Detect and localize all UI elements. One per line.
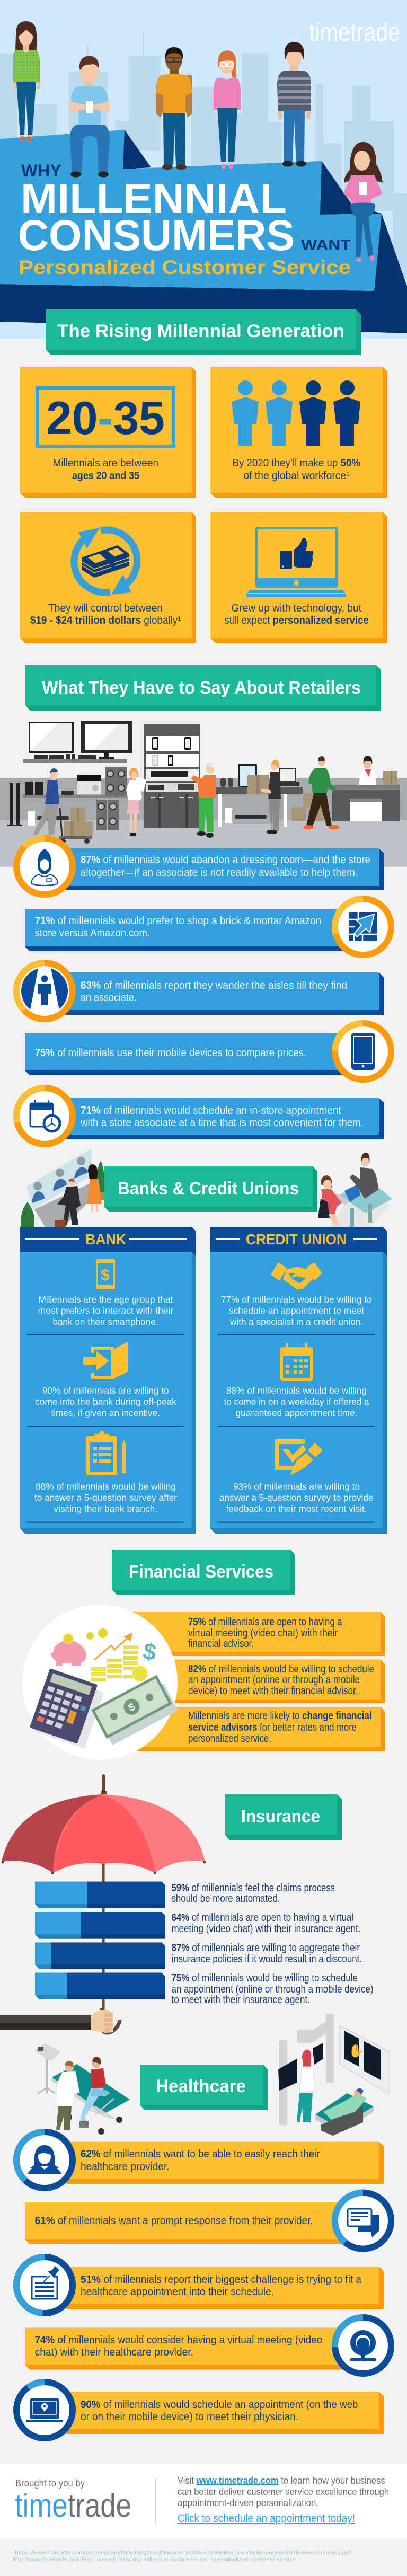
- text block: come into the bank during off-peak: [35, 1396, 176, 1407]
- text block: most prefers to interact with their: [38, 1305, 174, 1316]
- caption: [232, 457, 360, 482]
- text: [81, 2274, 362, 2298]
- checkout counter: [324, 756, 400, 821]
- icon: piggy bank: [50, 1628, 108, 1666]
- text block: times, if given an incentive.: [51, 1407, 160, 1418]
- text: [81, 980, 347, 1004]
- small x-ray plates: [278, 2043, 323, 2091]
- text: healthcare provider.: [81, 2161, 170, 2173]
- radiologist: [297, 2050, 315, 2122]
- caption: They will control between: [48, 603, 163, 614]
- stat: compare prices 75%: [25, 1023, 391, 1079]
- stat bar: virtual meeting: financial advisor.: [188, 1638, 254, 1650]
- text block: schedule an appointment to meet: [229, 1305, 364, 1316]
- banner: retailers: What They Have to Say About Retailers: [42, 678, 361, 698]
- stat bar: schedule appointment: 82% of millennials would be willing to schedule: [188, 1663, 374, 1675]
- illustration: doctor and patient: [34, 2043, 130, 2135]
- person: man in green walking: [303, 756, 340, 829]
- text block: Millennials are the age group that: [38, 1294, 173, 1305]
- text block: 77% of millennials would be willing to: [221, 1294, 372, 1305]
- icon: calculator: [29, 1668, 105, 1749]
- caption: [30, 603, 181, 626]
- caption: Millennials are between: [53, 457, 158, 469]
- stat bar: change advisors: service advisors for better rates and more: [188, 1722, 357, 1733]
- bar 64%: [35, 1912, 165, 1939]
- text block: [221, 1294, 372, 1327]
- caption: By 2020 they’ll make up 50%: [232, 457, 360, 469]
- icon: money cycle: [74, 528, 137, 595]
- text block: bank on their smartphone.: [53, 1316, 158, 1327]
- person: salesman with box: [261, 760, 281, 834]
- person: older man on phone: [191, 763, 216, 838]
- age range box: 20-35: [46, 392, 165, 444]
- text block: [224, 1385, 369, 1418]
- call to action text: can better deliver customer service excellence through: [178, 2486, 389, 2497]
- stat: dressing room 87%: [16, 838, 384, 895]
- text: altogether—if an associate is not readily available to help them.: [81, 867, 358, 879]
- card: spending power: [20, 512, 196, 643]
- banner: financial services: Financial Services: [129, 1562, 273, 1582]
- person: woman in orange dress: [87, 1164, 102, 1212]
- stat bar: change advisors: Millennials are more likely to change financial: [188, 1710, 372, 1722]
- person: seated woman with phone: [343, 142, 383, 262]
- banner: healthcare: Healthcare: [156, 2076, 246, 2096]
- banner: healthcare: [140, 2065, 268, 2110]
- banner: rising generation: [46, 309, 361, 355]
- heading: credit union: CREDIT UNION: [246, 1231, 347, 1247]
- text: [80, 1105, 364, 1129]
- text: insurance stats: insurance policies if it would result in a discount.: [172, 1953, 362, 1965]
- panel: bank: [20, 1227, 196, 1534]
- x-ray panels: ✋: [348, 2043, 364, 2058]
- icon: handshake: [271, 1262, 322, 1289]
- medical monitor stand: [34, 2043, 61, 2093]
- person: advisor: [350, 1153, 378, 1199]
- text: insurance stats: meeting (video chat) with their insurance agent.: [172, 1923, 360, 1935]
- stat: brick and mortar 71%: [25, 899, 391, 955]
- dollar sign: $: [141, 1638, 158, 1666]
- icon: chat bubbles: [335, 2193, 391, 2249]
- text: an associate.: [81, 992, 137, 1004]
- text block: [34, 1481, 177, 1514]
- text block: to come in on a weekday if offered a: [224, 1396, 369, 1407]
- banner: retailers: [25, 665, 381, 711]
- text block: to answer a 5-question survey after: [34, 1492, 177, 1503]
- text: 90% of millennials would schedule an appointment (on the web: [81, 2399, 358, 2411]
- icon: workforce people: [232, 380, 360, 446]
- illustration: money circle: [22, 1605, 178, 1760]
- text: 62% of millennials want to be able to easily reach their: [81, 2148, 320, 2160]
- card: workforce: [210, 367, 387, 498]
- person: delivery man: [33, 768, 93, 844]
- icon: mobile phone: [335, 1023, 391, 1079]
- caption: Grew up with technology, but: [231, 603, 361, 614]
- illustration: x-ray room: [278, 2014, 390, 2136]
- text: chat) with their healthcare provider.: [35, 2347, 193, 2358]
- call to action text: appointment-driven personalization.: [178, 2498, 318, 2508]
- banner: insurance: Insurance: [241, 1807, 320, 1827]
- text: [81, 2148, 320, 2173]
- banner: financial services: [112, 1550, 295, 1595]
- footer panel: [0, 2464, 407, 2539]
- consumers word: CONSUMERS: [18, 211, 295, 260]
- illustration: advisor meeting: [318, 1153, 392, 1227]
- icon: clipboard and pencil: [86, 1431, 126, 1475]
- illustration: umbrella: [1, 1774, 206, 2010]
- text: store versus Amazon.com.: [35, 927, 150, 939]
- card: ages: [20, 367, 196, 498]
- call to action text: Visit www.timetrade.com to learn how your business: [178, 2475, 385, 2486]
- text: [81, 2399, 358, 2423]
- illustration: bank tellers: [21, 1148, 105, 1227]
- laptop: [333, 1184, 360, 1205]
- stat bar: virtual meeting: virtual meeting (video chat) with their: [188, 1627, 338, 1639]
- text: 71% of millennials would schedule an in-store appointment: [81, 1105, 341, 1117]
- timetrade logo: timetrade: [15, 2488, 131, 2524]
- tree left: [21, 1202, 34, 1227]
- stat: prompt response 61%: [25, 2193, 391, 2249]
- icon: webcam: [335, 2317, 391, 2374]
- banner: rising generation: The Rising Millennial Generation: [57, 321, 344, 341]
- person: man at counter: [55, 1179, 81, 1227]
- icon: pinned note: [16, 2257, 73, 2313]
- text: insurance stats: 75% of millennials would be willing to schedule: [172, 1972, 358, 1984]
- icon: dollar bill: $: [126, 1701, 137, 1714]
- bar 75%: [35, 1972, 165, 1999]
- cardboard boxes: [291, 793, 323, 821]
- text: or on their mobile device) to meet their physician.: [81, 2411, 298, 2423]
- heading: bank: BANK: [85, 1231, 126, 1247]
- text: healthcare appointment into their schedule.: [81, 2286, 274, 2298]
- illustration: electronics store: [0, 721, 407, 867]
- text block: answer a 5-question survey to provide: [219, 1492, 373, 1503]
- text: 74% of millennials would consider having a virtual meeting (video: [35, 2334, 322, 2346]
- caption: [53, 457, 158, 482]
- icon: door with arrow: [83, 1341, 128, 1379]
- stat: wander aisles 63%: [16, 963, 384, 1019]
- stat bar: schedule appointment: an appointment (online or through a mobile: [188, 1674, 360, 1686]
- text block: 88% of millennials would be willing: [226, 1385, 367, 1396]
- stat bar: virtual meeting: [132, 1612, 385, 1656]
- text: [35, 915, 321, 939]
- person: woman in green top: [13, 21, 40, 141]
- icon: bricks and trowel: [335, 899, 391, 955]
- hero ramp: blue podium: [0, 130, 407, 333]
- text block: 90% of millennials are willing to: [42, 1385, 169, 1396]
- banner: banks and credit unions: Banks & Credit Unions: [118, 1179, 299, 1199]
- person: woman with clipboard: [126, 768, 147, 836]
- illustration: hand holding umbrella: [0, 2008, 120, 2033]
- panel: credit union: [210, 1227, 387, 1534]
- text block: with a specialist in a credit union.: [229, 1316, 363, 1327]
- call to action text: [178, 2475, 389, 2525]
- icon: coin stacks: [91, 1645, 147, 1681]
- text: insurance stats: should be more automated.: [172, 1893, 280, 1905]
- caption: of the global workforce¹: [244, 470, 350, 482]
- text: insurance stats: to meet with their insurance agent.: [172, 1994, 310, 2006]
- stat bar: virtual meeting: 75% of millennials are open to having a: [188, 1616, 342, 1628]
- caption: $19 - $24 trillion dollars globally¹: [30, 615, 181, 626]
- bar 59%: [35, 1882, 165, 1908]
- text: 87% of millennials would abandon a dressing room—and the store: [81, 854, 370, 866]
- footnotes: ¹https://www2.deloitte.com/content/dam/Deloitte/global/Documents/About-Deloitte/gx-millenial-survey-2016-exec-summary.pdf: [13, 2550, 351, 2556]
- card: technology: [210, 512, 387, 643]
- x-ray machine: [279, 2014, 334, 2125]
- person: seated man with phone: [69, 56, 110, 177]
- store table with devices: [215, 764, 303, 827]
- icon: headset agent: [16, 2132, 73, 2188]
- person: man in striped sweater: [277, 42, 311, 166]
- text block: guaranteed appointment time.: [235, 1407, 357, 1418]
- text block: [219, 1481, 373, 1514]
- caption: ages 20 and 35: [72, 470, 139, 482]
- bar 87%: [35, 1943, 165, 1969]
- call to action text: Click to schedule an appointment today!: [178, 2512, 355, 2525]
- stat: fit appointment 51%: [16, 2257, 384, 2313]
- text: insurance stats: an appointment (online or through a mobile device): [172, 1984, 373, 1995]
- caption: [225, 603, 369, 626]
- footnotes: [13, 2550, 351, 2563]
- title: [18, 161, 351, 278]
- icon: checkbox and pen: [275, 1439, 323, 1475]
- stat: in-store appointment 71%: [16, 1088, 384, 1144]
- hero header panel: [0, 0, 407, 339]
- text: with a store associate at a time that is most convenient for them.: [80, 1117, 364, 1129]
- text: insurance stats: 64% of millennials are open to having a virtual: [172, 1912, 353, 1924]
- icon: growth arrow: [94, 1634, 131, 1660]
- stat bar: change advisors: [132, 1707, 385, 1751]
- icon: person in spotlight: [16, 963, 73, 1019]
- millennial word: MILLENNIAL: [21, 175, 287, 222]
- patient: [79, 2057, 110, 2128]
- icon: dollar bill: [91, 1674, 178, 1746]
- want label: WANT: [301, 237, 351, 254]
- text block: 93% of millennials are willing to: [233, 1481, 360, 1492]
- text: [35, 2334, 322, 2358]
- icon: smartphone dollar: [96, 1259, 115, 1289]
- panel: financial stats: [22, 1605, 385, 1760]
- text: 75% of millennials use their mobile devices to compare prices.: [35, 1047, 306, 1059]
- text: 61% of millennials want a prompt response from their provider.: [35, 2215, 313, 2227]
- text: 51% of millennials report their biggest challenge is trying to fit a: [81, 2274, 362, 2286]
- scanner table and patient: [315, 2088, 374, 2136]
- stat bar: schedule appointment: device) to meet with their financial advisor.: [188, 1685, 358, 1697]
- text: insurance stats: 87% of millennials are willing to aggregate their: [172, 1942, 360, 1954]
- stat bar: change advisors: personalized service.: [188, 1733, 271, 1745]
- person: woman in pink top: [214, 50, 241, 169]
- why label: WHY: [21, 161, 61, 180]
- tree right: [95, 1161, 104, 1200]
- banner: insurance: [225, 1794, 342, 1840]
- person: man in orange shirt: [156, 47, 192, 170]
- text: 63% of millennials report they wander the aisles till they find: [81, 980, 347, 992]
- banner: banks and credit unions: [104, 1166, 317, 1212]
- subtitle: Personalized Customer Service: [19, 256, 351, 278]
- stretcher: [52, 2064, 130, 2135]
- x-ray panels: [340, 2025, 390, 2094]
- text block: feedback on their most recent visit.: [226, 1503, 367, 1514]
- doctor: [56, 2061, 79, 2130]
- icon: laptop thumbs up: [246, 527, 346, 597]
- text: insurance stats: [172, 1882, 373, 2006]
- icon: laptop with map pin: [16, 2382, 73, 2438]
- text: insurance stats: 59% of millennials feel the claims process: [172, 1882, 335, 1894]
- text block: 88% of millennials would be willing: [36, 1481, 176, 1492]
- icon: store associate: [16, 838, 73, 895]
- text block: [38, 1294, 174, 1327]
- icon: smartphone dollar: $: [101, 1267, 110, 1284]
- icon: calendar and clock: [16, 1088, 73, 1144]
- chart: insurance bars: [35, 1882, 165, 1999]
- stat: virtual meeting 74%: [25, 2317, 391, 2374]
- stat: schedule physician 90%: [16, 2382, 384, 2438]
- stat: easily reach 62%: [16, 2132, 384, 2188]
- caption: still expect personalized service: [225, 615, 369, 626]
- footnotes: http://www.timetrade.com/resources/ebooks/why-millennial-customers-want-personalized-customer-service: [13, 2557, 296, 2563]
- stat bar: schedule appointment: [159, 1660, 385, 1703]
- icon: calendar: [280, 1343, 313, 1381]
- brought by label: Brought to you by: [15, 2478, 85, 2489]
- text: 71% of millennials would prefer to shop a brick & mortar Amazon: [35, 915, 321, 927]
- text block: [35, 1385, 176, 1418]
- phone display cabinet: [144, 724, 200, 828]
- city skyline: [0, 30, 407, 278]
- person: client: [318, 1175, 342, 1226]
- text: [81, 854, 370, 879]
- text block: visiting their bank branch.: [54, 1503, 157, 1514]
